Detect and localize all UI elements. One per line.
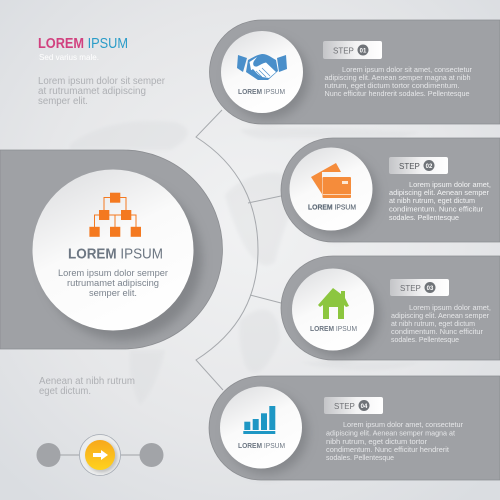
subtitle: Sed varius male. — [39, 52, 99, 62]
central text: Lorem ipsum dolor semper — [58, 268, 168, 278]
step text: sodales. Pellentesque — [389, 213, 459, 222]
step tag — [390, 279, 449, 296]
step text: nibh rutrum, eget dictum tortor — [326, 437, 428, 446]
intro text: at rutrumamet adipiscing — [38, 86, 146, 97]
connector arc and lines — [196, 110, 281, 390]
step text: condimentum. Nunc efficitur — [391, 327, 484, 336]
step text: at nibh rutrum, eget dictum — [389, 196, 475, 205]
step text: sodales. Pellentesque — [326, 453, 394, 462]
step tag — [324, 397, 383, 414]
step text — [324, 65, 473, 98]
step text — [391, 303, 491, 344]
panel: step 2 — [281, 138, 500, 242]
navigation control — [36, 434, 164, 476]
world map backdrop — [70, 121, 420, 405]
step tag: 02 — [426, 164, 433, 170]
footer note: eget dictum. — [39, 386, 91, 397]
step text: condimentum. Nunc efficitur — [389, 204, 484, 214]
step tag: 03 — [427, 286, 434, 292]
step text: adipiscing elit. Aenean semper magna at — [326, 428, 455, 438]
step tag: STEP — [333, 46, 354, 56]
step text — [389, 180, 491, 222]
disc — [290, 148, 372, 230]
step tag — [389, 157, 448, 174]
intro text: semper elit. — [38, 96, 88, 107]
step text: adipiscing elit. Aenean semper — [391, 311, 490, 320]
icon: cards — [311, 163, 351, 198]
panel: step 1 — [210, 20, 500, 124]
central disc — [32, 170, 194, 330]
step text: Lorem ipsum dolor amet, — [409, 303, 491, 312]
step text: Nunc efficitur hendrerit sodales. Pellentesque — [324, 89, 470, 98]
central text: rutrumamet adipiscing — [67, 278, 159, 288]
icon: house — [318, 288, 349, 319]
step text: sodales. Pellentesque — [391, 335, 459, 344]
step tag: STEP — [399, 162, 420, 171]
step tag: 04 — [361, 404, 368, 410]
panel: central — [0, 150, 222, 349]
central text — [58, 268, 168, 298]
step tag: STEP — [334, 402, 355, 411]
central heading: LOREM IPSUM — [68, 246, 163, 262]
intro text — [38, 76, 166, 107]
step text: at nibh rutrum, eget dictum — [391, 319, 475, 328]
title: LOREM IPSUM — [38, 36, 128, 52]
icon label: LOREM IPSUM — [238, 89, 285, 96]
step text: condimentum. Nunc efficitur hendrerit — [326, 445, 449, 454]
icon label: LOREM IPSUM — [238, 443, 285, 450]
step text: adipiscing elit. Aenean semper magna at nibh — [324, 73, 470, 82]
icon: organisation chart — [89, 193, 141, 237]
disc — [292, 268, 374, 350]
panel: step 4 — [209, 376, 500, 480]
step text — [326, 420, 464, 462]
footer note — [39, 376, 135, 397]
icon label: LOREM IPSUM — [308, 202, 356, 212]
step text: adipiscing elit. Aenean semper — [389, 188, 490, 197]
icon: handshake — [237, 54, 287, 80]
step text: Lorem ipsum dolor amet, consectetur — [343, 420, 464, 429]
icon label: LOREM IPSUM — [310, 326, 357, 333]
step text: rutrum, eget dictum tortor condimentum. — [324, 81, 460, 90]
central text: semper elit. — [89, 288, 137, 298]
step tag: 01 — [360, 48, 367, 54]
step tag — [323, 41, 382, 59]
icon: bar chart — [243, 406, 275, 434]
intro text: Lorem ipsum dolor sit semper — [38, 76, 166, 87]
footer note: Aenean at nibh rutrum — [39, 376, 135, 387]
step text: Lorem ipsum dolor sit amet, consectetur — [342, 65, 473, 74]
step text: Lorem ipsum dolor amet, — [409, 180, 491, 189]
step tag: STEP — [400, 284, 421, 293]
disc — [220, 386, 302, 468]
disc — [221, 31, 303, 113]
panel: step 3 — [281, 256, 500, 360]
icon: arrow — [93, 450, 108, 460]
